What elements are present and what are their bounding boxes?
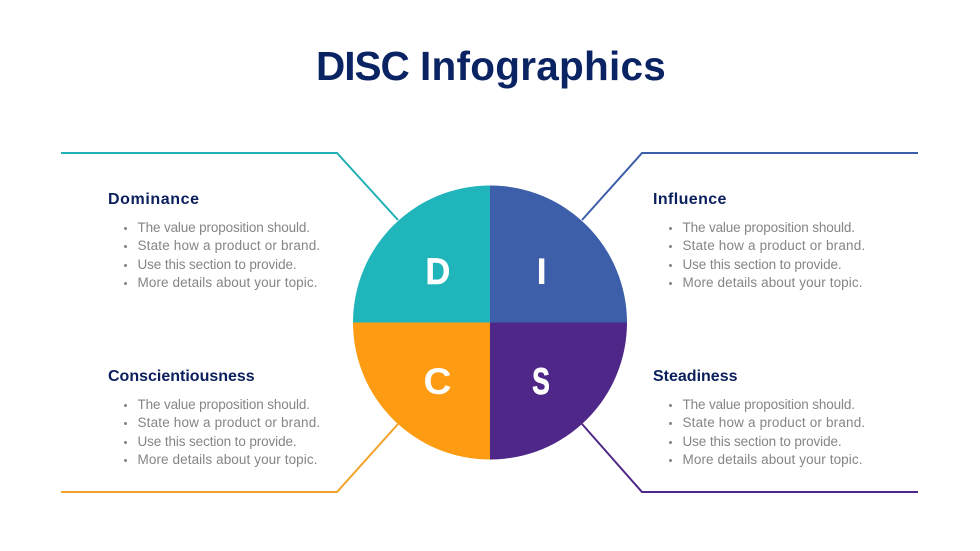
letter C: C bbox=[424, 361, 452, 402]
quadrant C bbox=[353, 322, 490, 460]
connector: Conscientiousness bbox=[61, 424, 398, 492]
bullet list: Dominance: The value proposition should. bbox=[138, 220, 310, 235]
bullet list: Dominance bbox=[124, 220, 320, 290]
bullet list: Influence: The value proposition should. bbox=[682, 220, 855, 235]
panel: Conscientiousness bbox=[108, 368, 320, 467]
title: DISC bbox=[316, 43, 409, 89]
bullet list: Steadiness: The value proposition should. bbox=[682, 397, 855, 412]
quadrant S bbox=[490, 322, 627, 460]
connector: Dominance bbox=[61, 153, 398, 220]
connector: Influence bbox=[582, 153, 918, 220]
bullet list: Influence: More details about your topic. bbox=[682, 275, 863, 290]
panel: Dominance bbox=[108, 191, 320, 290]
connector: Steadiness bbox=[582, 424, 918, 492]
bullet list: Steadiness bbox=[669, 397, 865, 467]
bullet list: Conscientiousness: Use this section to provide. bbox=[138, 434, 296, 449]
letter I: I bbox=[536, 251, 547, 292]
quadrant I bbox=[490, 186, 627, 322]
title: Infographics bbox=[420, 43, 666, 89]
bullet list: Dominance: Use this section to provide. bbox=[138, 257, 296, 272]
quadrant D bbox=[353, 186, 490, 322]
heading: Influence: Influence bbox=[653, 191, 727, 208]
panel: Influence bbox=[653, 191, 865, 290]
letter D: D bbox=[425, 251, 450, 292]
heading: Steadiness: Steadiness bbox=[653, 368, 737, 385]
bullet list: Steadiness: More details about your topic. bbox=[682, 452, 863, 467]
heading: Dominance: Dominance bbox=[108, 191, 200, 208]
heading: Conscientiousness: Conscientiousness bbox=[108, 368, 255, 385]
bullet list: Conscientiousness: State how a product or brand. bbox=[138, 415, 320, 430]
bullet list: Steadiness: Use this section to provide. bbox=[682, 434, 842, 449]
bullet list: Conscientiousness: More details about your topic. bbox=[138, 452, 318, 467]
bullet list: Dominance: More details about your topic. bbox=[138, 275, 318, 290]
bullet list: Steadiness: State how a product or brand. bbox=[682, 415, 865, 430]
panel: Steadiness bbox=[653, 368, 865, 467]
bullet list: Conscientiousness bbox=[124, 397, 320, 467]
bullet list: Dominance: State how a product or brand. bbox=[138, 238, 320, 253]
bullet list: Conscientiousness: The value proposition should. bbox=[138, 397, 310, 412]
bullet list: Influence: Use this section to provide. bbox=[682, 257, 842, 272]
letter S: S bbox=[532, 361, 550, 402]
bullet list: Influence bbox=[669, 220, 865, 290]
bullet list: Influence: State how a product or brand. bbox=[682, 238, 865, 253]
